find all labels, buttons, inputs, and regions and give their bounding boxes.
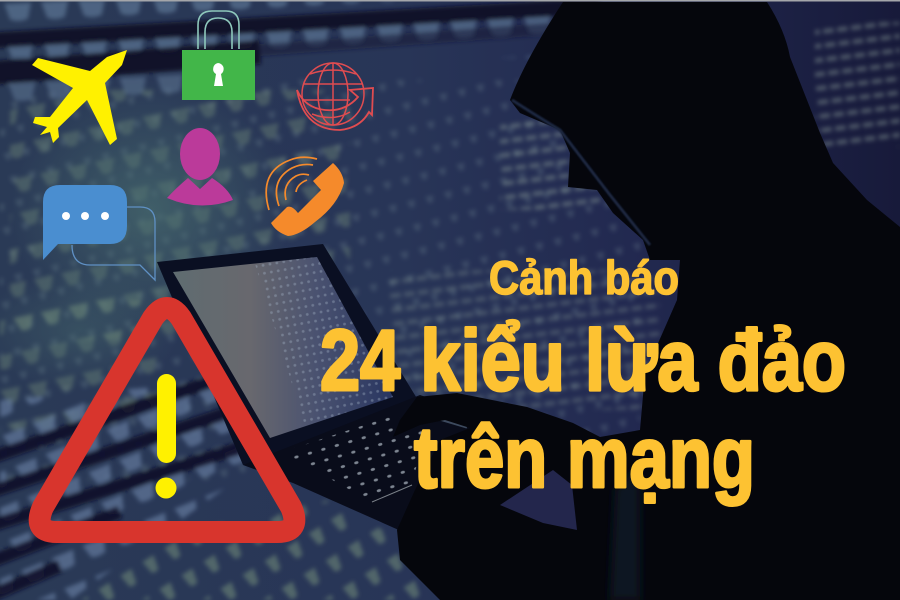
user head: [180, 128, 220, 180]
gap between arm and body: [500, 470, 577, 530]
padlock body: [182, 50, 255, 100]
icon: warning triangle: [40, 308, 294, 532]
chat bubble filled: [43, 185, 127, 260]
title: [320, 251, 846, 506]
hood edge shading: [512, 100, 650, 245]
padlock keyhole: [213, 63, 224, 86]
chat bubble outline: [72, 207, 155, 280]
chat dots: [62, 212, 109, 220]
exclamation bar: [157, 374, 176, 463]
icon: airplane: [32, 50, 127, 145]
laptop: [157, 244, 480, 535]
sleeve shading: [610, 465, 640, 600]
laptop lid: [157, 244, 424, 465]
exclamation dot: [156, 478, 176, 498]
user shoulders: [167, 178, 233, 206]
icon: globe with arrow: [297, 63, 373, 130]
icon: chat bubbles: [43, 185, 155, 280]
laptop keyboard: [243, 395, 480, 535]
icon: user: [167, 128, 233, 206]
laptop screen: [173, 257, 393, 438]
icon: padlock: [182, 11, 255, 100]
padlock shackle: [198, 11, 239, 49]
hacker silhouette: [393, 2, 900, 600]
title line 1: Cảnh báo: [489, 251, 679, 304]
warning triangle outline: [40, 308, 294, 532]
phone handset: [271, 163, 344, 236]
signal waves: [266, 157, 317, 210]
title line 3: trên mạng: [414, 410, 755, 506]
icon: phone with signal waves: [266, 157, 344, 236]
